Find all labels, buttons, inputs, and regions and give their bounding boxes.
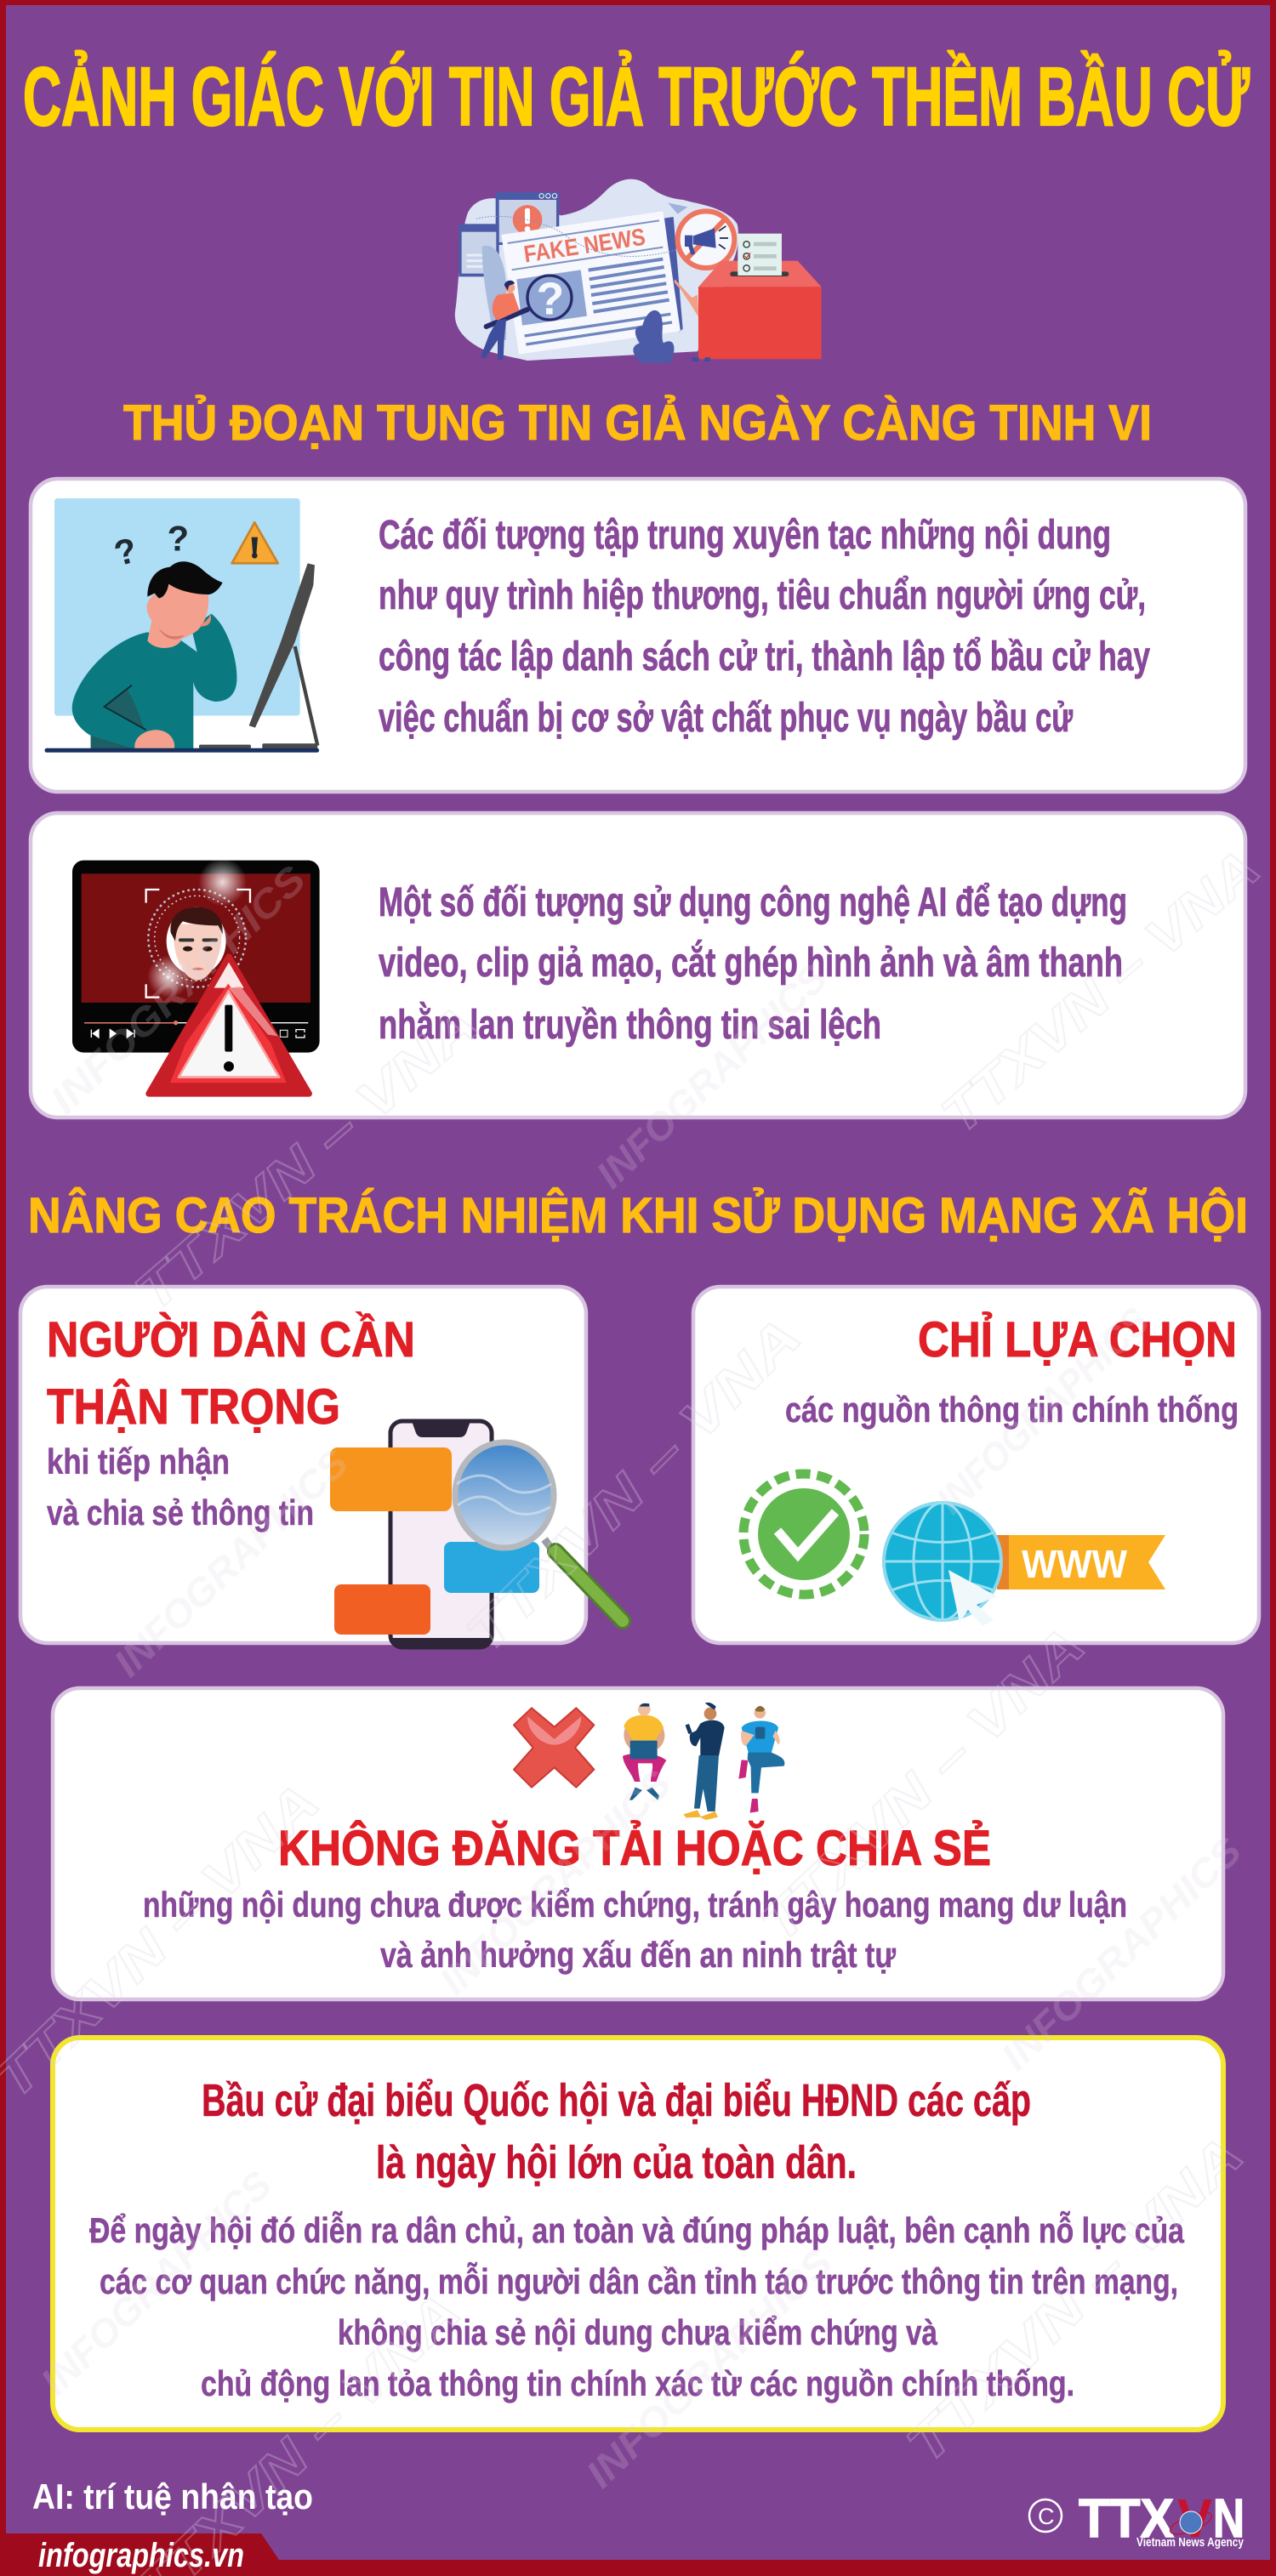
panel: distorting content <box>31 479 1245 792</box>
text block: distortion targets <box>379 513 1150 741</box>
logo: TTXVN: TTX <box>1079 2488 1174 2549</box>
text block: when receiving and sharing: khi tiếp nhận <box>47 1442 230 1481</box>
icon: three people with devices <box>623 1703 784 1820</box>
text block: unverified content: và ảnh hưởng xấu đến an ninh trật tự <box>380 1935 896 1975</box>
text: TTXVN – VNA <box>896 2125 1255 2475</box>
text block: AI forgeries: nhằm lan truyền thông tin sai lệch <box>379 1001 881 1048</box>
text: TTXVN – VNA <box>931 839 1271 1146</box>
footer band with source <box>0 2533 1276 2576</box>
panel: be careful <box>20 1287 623 1649</box>
heading: people must be careful: NGƯỜI DÂN CẦN <box>47 1312 415 1368</box>
text block: when receiving and sharing: và chia sẻ thông tin <box>47 1493 314 1533</box>
heading: national festival <box>202 2075 1031 2188</box>
text block: when receiving and sharing <box>47 1442 314 1533</box>
icon: deepfake video with warning triangle <box>72 858 320 1094</box>
text: INFOGRAPHICS <box>431 1761 680 2003</box>
icon: confused man at computer: ? <box>168 519 189 559</box>
text: INFOGRAPHICS <box>928 1299 1158 1522</box>
heading: tactics: THỦ ĐOẠN TUNG TIN GIẢ NGÀY CÀNG TINH VI <box>123 395 1152 451</box>
text: TTXVN – VNA <box>749 1616 1096 1953</box>
heading: only choose: CHỈ LỰA CHỌN <box>918 1312 1237 1368</box>
heading: do not post: KHÔNG ĐĂNG TẢI HOẶC CHIA SẺ <box>278 1821 991 1876</box>
text: TTXVN – VNA <box>124 994 490 1323</box>
icon: verified badge <box>743 1474 864 1595</box>
panel: conclusion callout <box>53 2038 1223 2430</box>
text block: citizen advice: không chia sẻ nội dung chưa kiểm chứng và <box>338 2312 937 2352</box>
footnote: AI: trí tuệ nhân tạo <box>32 2476 313 2516</box>
heading: people must be careful: THẬN TRỌNG <box>47 1379 340 1435</box>
icon: WWW ribbon <box>997 1535 1165 1589</box>
panel: AI fakes <box>31 813 1245 1117</box>
illustration: fake news newspaper and ballot box <box>455 179 822 363</box>
heading: national festival: là ngày hội lớn của toàn dân. <box>376 2137 857 2188</box>
illustration: fake news newspaper and ballot box: FAKE NEWS <box>522 224 647 268</box>
heading: people must be careful <box>47 1312 415 1435</box>
text: TTXVN – VNA <box>455 1307 812 1664</box>
text: INFOGRAPHICS <box>993 1828 1250 2078</box>
icon: red cross <box>514 1708 594 1788</box>
text: INFOGRAPHICS <box>105 1440 356 1685</box>
panel: official sources <box>693 1287 1259 1643</box>
text: INFOGRAPHICS <box>578 2240 841 2496</box>
text block: citizen advice <box>89 2209 1185 2403</box>
text block: unverified content <box>143 1885 1127 1975</box>
icon: WWW ribbon: WWW <box>1022 1542 1128 1586</box>
illustration: fake news newspaper and ballot box: ? <box>537 274 564 324</box>
icon: globe with cursor <box>884 1503 1001 1626</box>
text block: citizen advice: chủ động lan tỏa thông tin chính xác từ các nguồn chính thống. <box>201 2363 1074 2403</box>
logo: TTXVN: Vietnam News Agency <box>1136 2535 1245 2550</box>
footer band with source: infographics.vn <box>38 2537 244 2574</box>
logo: TTXVN: N <box>1213 2488 1245 2549</box>
icon: confused man at computer: ? <box>110 530 141 573</box>
logo: TTXVN: C <box>1038 2504 1055 2529</box>
logo: TTXVN: V <box>1177 2488 1212 2549</box>
logo: TTXVN <box>1029 2488 1245 2550</box>
text: INFOGRAPHICS <box>588 955 836 1197</box>
text block: AI forgeries <box>379 880 1127 1048</box>
text: INFOGRAPHICS <box>42 856 314 1122</box>
text: INFOGRAPHICS <box>32 2162 281 2403</box>
icon: phone with magnifier <box>330 1421 623 1649</box>
icon: confused man at computer <box>47 498 317 750</box>
panel: do not post or share <box>53 1688 1223 1999</box>
